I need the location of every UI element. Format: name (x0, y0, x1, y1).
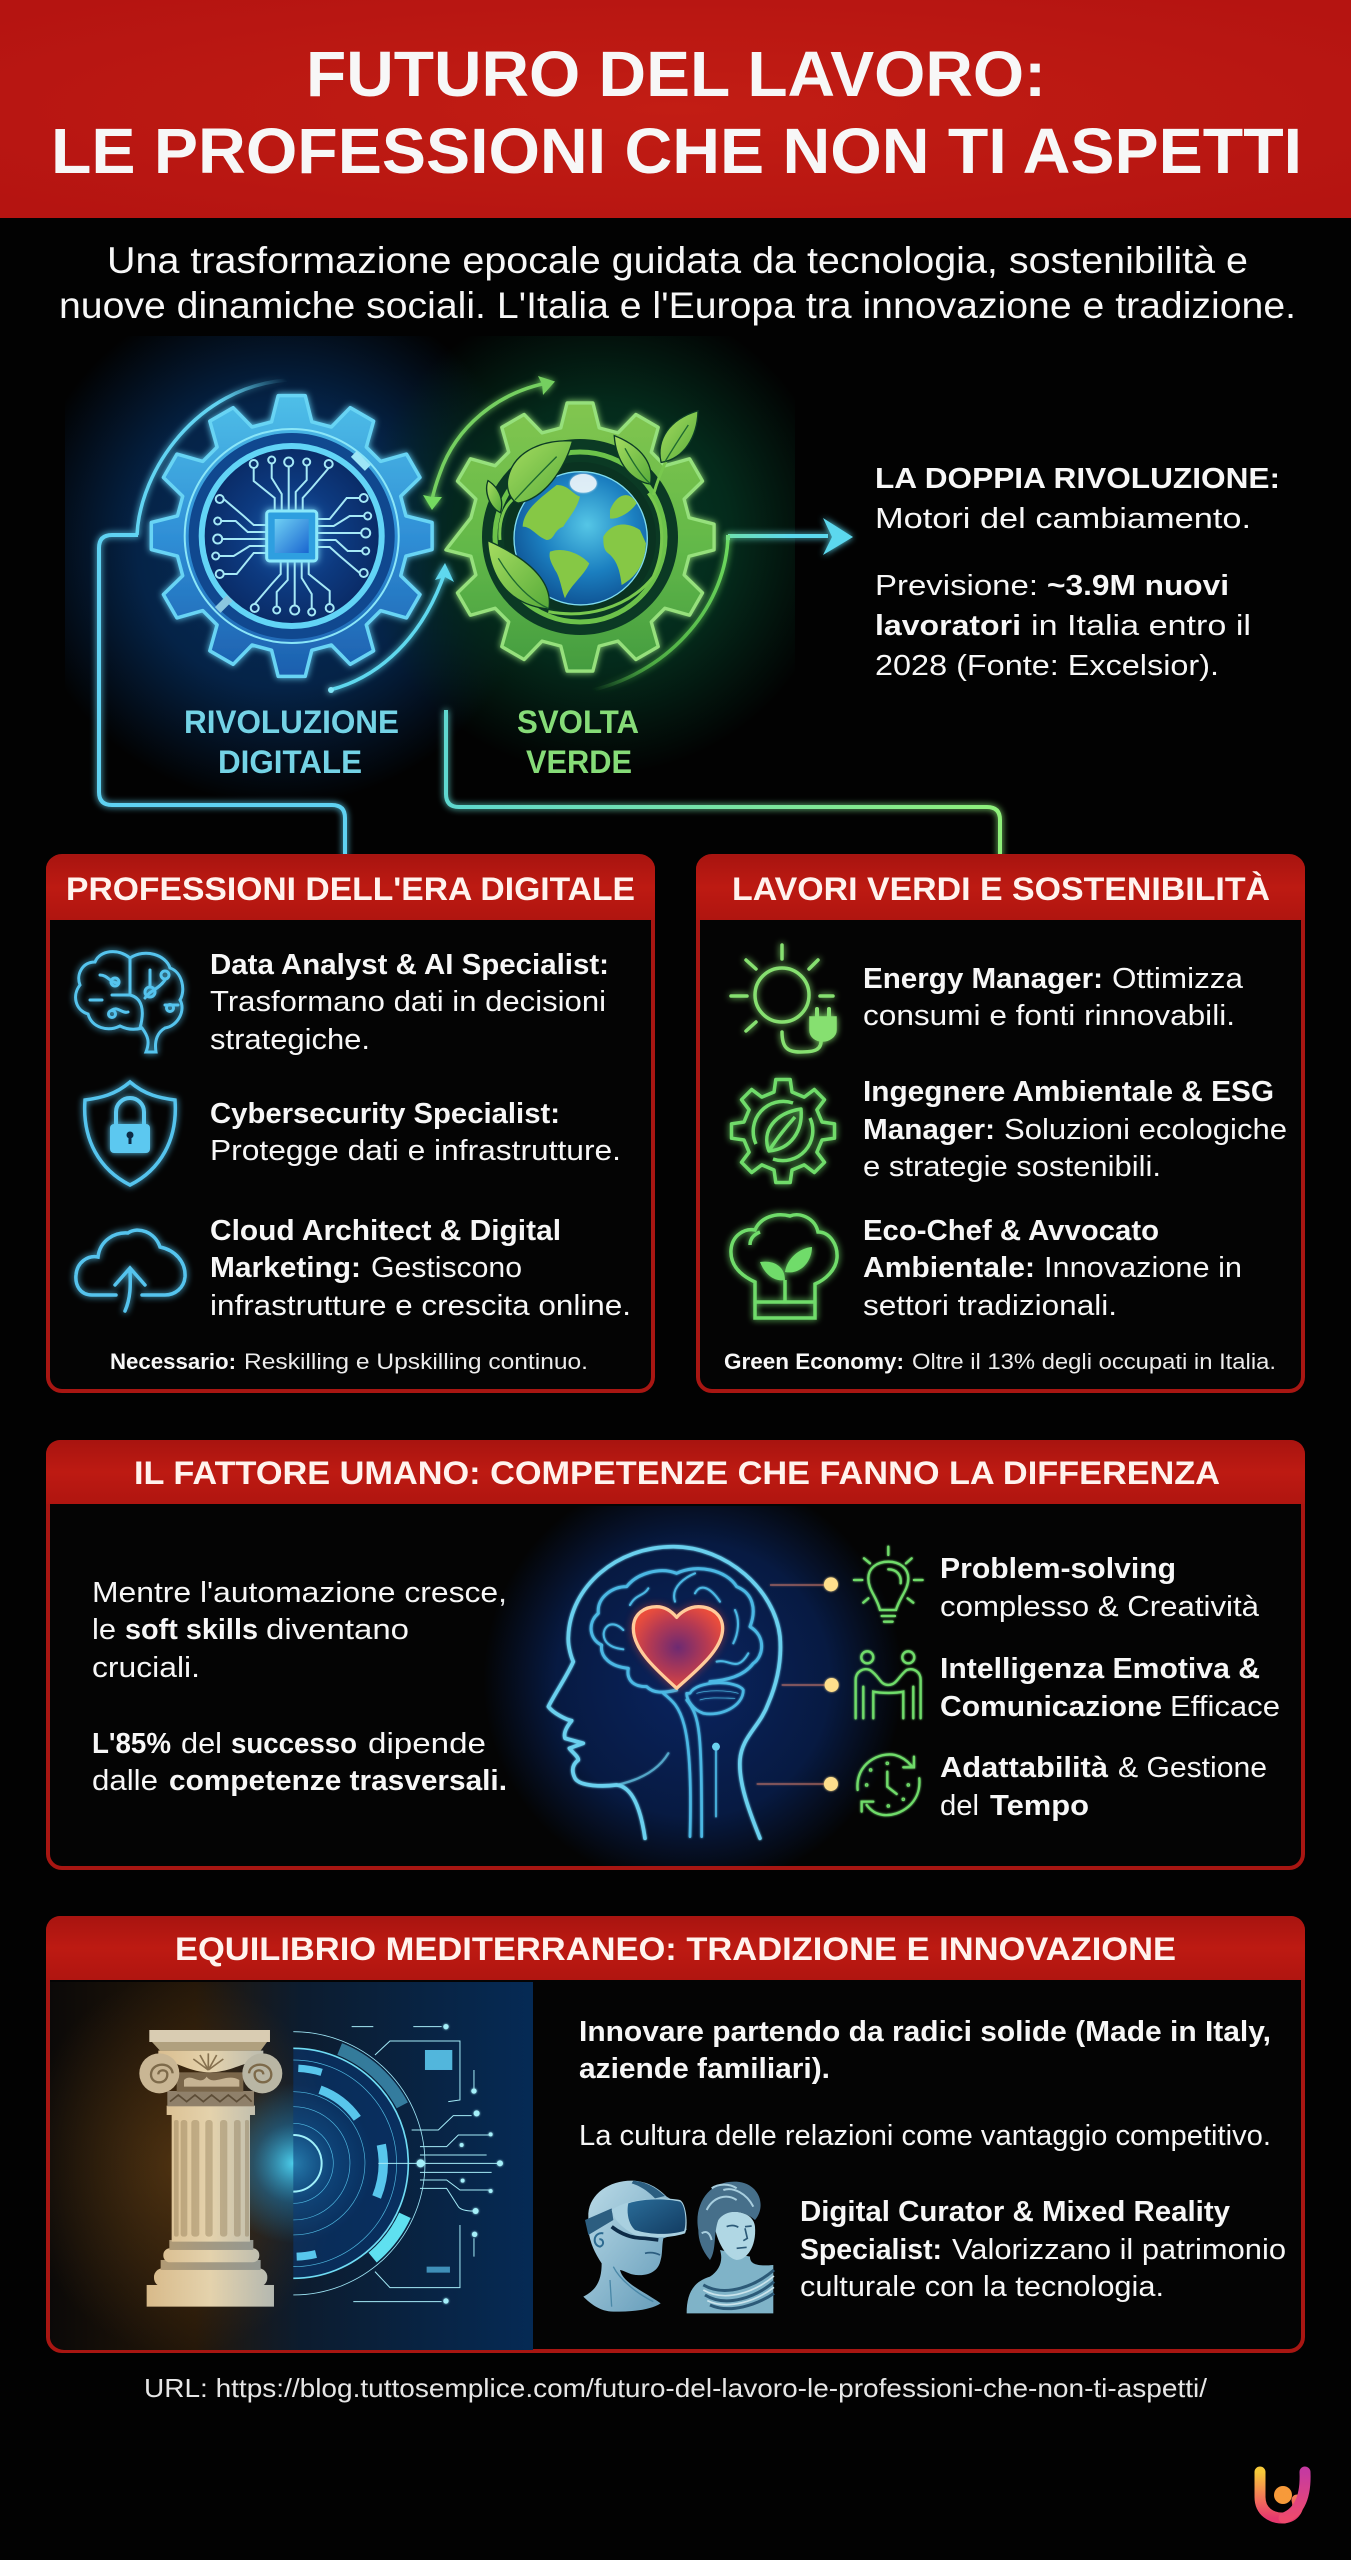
job text: data analyst: Trasformano dati in decisioni (210, 986, 606, 1018)
source url: URL: https://blog.tuttosemplice.com/futuro-del-lavoro-le-professioni-che-non-ti-aspetti/ (144, 2373, 1208, 2403)
label: svolta verde: VERDE (526, 744, 632, 780)
subtitle: nuove dinamiche sociali. L'Italia e l'Europa tra innovazione e tradizione. (59, 285, 1296, 326)
illustration: head with brain and heart (478, 1506, 923, 1866)
arrow to right (728, 518, 853, 555)
text: soft skills: soft skills (125, 1614, 258, 1646)
text: soft skills: Mentre l'automazione cresce, (92, 1577, 507, 1609)
panel heading: PROFESSIONI DELL'ERA DIGITALE (66, 871, 635, 907)
text: innovare (579, 2016, 1271, 2085)
title line 2: LE PROFESSIONI CHE NON TI ASPETTI (51, 115, 1302, 187)
heart (633, 1607, 723, 1688)
icon: sun with plug (731, 945, 835, 1052)
label: rivoluzione digitale (184, 704, 399, 780)
text block: la doppia rivoluzione: ~3.9M nuovi (1047, 570, 1229, 602)
job text: digital curator (800, 2196, 1286, 2303)
label: rivoluzione digitale: RIVOLUZIONE (184, 704, 399, 740)
icon: handshake (856, 1651, 921, 1718)
icon: clock (857, 1754, 919, 1815)
job text: energy manager: consumi e fonti rinnovabili. (863, 1000, 1235, 1032)
brain (591, 1569, 762, 1837)
skill: adaptability: Adattabilità (940, 1752, 1109, 1784)
job text: eco-chef: Ambientale: (863, 1252, 1035, 1284)
connector dots (757, 1577, 839, 1791)
panel note: Oltre il 13% degli occupati in Italia. (912, 1349, 1276, 1374)
panel note: Green Economy: (724, 1349, 904, 1374)
chip (267, 511, 317, 561)
text: soft skills: del (181, 1728, 222, 1760)
text: soft skills: L'85% (92, 1728, 171, 1760)
panel heading: IL FATTORE UMANO: COMPETENZE CHE FANNO LA DIFFERENZA (134, 1455, 1220, 1491)
text block: la doppia rivoluzione: LA DOPPIA RIVOLUZIONE: (875, 463, 1280, 495)
skill: adaptability: Tempo (990, 1790, 1089, 1822)
job text: cybersecurity: Protegge dati e infrastrutture. (210, 1135, 621, 1167)
job text: ingegnere ambientale: Soluzioni ecologiche (1004, 1114, 1287, 1146)
panel: professioni dell'era digitale (46, 855, 655, 1391)
connector lines to panels (99, 535, 1000, 858)
illustration: VR head and classical bust (583, 2181, 774, 2313)
icon: brain (76, 952, 183, 1052)
subtitle (59, 240, 1296, 326)
job text: ingegnere ambientale (863, 1076, 1287, 1183)
label: svolta verde (517, 704, 639, 780)
panel: equilibrio mediterraneo (20, 1916, 1305, 2355)
label: rivoluzione digitale: DIGITALE (218, 744, 362, 780)
leaves (487, 412, 697, 614)
icon: chef hat with sprout (731, 1215, 837, 1318)
panel heading: LAVORI VERDI E SOSTENIBILITÀ (732, 871, 1270, 907)
job text: energy manager (863, 963, 1244, 1032)
text: soft skills: diventano (266, 1614, 409, 1646)
skill: emotional intelligence: Comunicazione (940, 1691, 1162, 1723)
text: soft skills: le (92, 1614, 116, 1646)
job text: cybersecurity: Cybersecurity Specialist: (210, 1098, 560, 1130)
icon: lightbulb (854, 1547, 923, 1622)
skill: emotional intelligence: Efficace (1170, 1691, 1280, 1723)
text block: la doppia rivoluzione: Previsione: (875, 570, 1038, 602)
job text: data analyst (210, 949, 609, 1056)
job text: data analyst: strategiche. (210, 1024, 370, 1056)
job text: cybersecurity (210, 1098, 621, 1167)
text block: la doppia rivoluzione: Motori del cambiamento. (875, 503, 1251, 535)
digital half circle (293, 2005, 503, 2325)
job text: cloud architect: Gestiscono (371, 1252, 522, 1284)
skill: adaptability: del (940, 1790, 979, 1822)
skill: adaptability (940, 1752, 1267, 1822)
text: soft skills: dalle (92, 1765, 158, 1797)
circuit traces (352, 2027, 500, 2302)
skill: problem solving (940, 1553, 1260, 1623)
text: soft skills (92, 1577, 507, 1797)
job text: digital curator: Digital Curator & Mixed Reality (800, 2196, 1230, 2228)
skill: adaptability: & Gestione (1118, 1752, 1267, 1784)
job text: eco-chef: Eco-Chef & Avvocato (863, 1215, 1159, 1247)
globe (514, 472, 647, 605)
icon: gear with leaf (732, 1080, 834, 1182)
job text: digital curator: culturale con la tecnologia. (800, 2271, 1164, 2303)
text: soft skills: successo (231, 1728, 357, 1760)
job text: eco-chef: Innovazione in (1044, 1252, 1242, 1284)
text block: la doppia rivoluzione: 2028 (Fonte: Excelsior). (875, 650, 1219, 682)
label: svolta verde: SVOLTA (517, 704, 639, 740)
header banner with title (0, 0, 1351, 218)
job text: data analyst: Data Analyst & AI Specialist: (210, 949, 609, 981)
job text: energy manager: Energy Manager: (863, 963, 1103, 995)
text: soft skills: cruciali. (92, 1652, 200, 1684)
job text: cloud architect: infrastrutture e crescita online. (210, 1290, 631, 1322)
panel note (724, 1349, 1276, 1374)
icon: green gear with globe (446, 403, 714, 671)
job text: ingegnere ambientale: Ingegnere Ambientale & ESG (863, 1076, 1274, 1108)
text: innovare: aziende familiari). (579, 2053, 830, 2085)
panel note: Reskilling e Upskilling continuo. (244, 1349, 588, 1374)
job text: cloud architect: Cloud Architect & Digital (210, 1215, 561, 1247)
job text: cloud architect: Marketing: (210, 1252, 361, 1284)
job text: ingegnere ambientale: Manager: (863, 1114, 995, 1146)
job text: eco-chef (863, 1215, 1242, 1322)
circular arrows (137, 376, 728, 693)
title line 1: FUTURO DEL LAVORO: (306, 38, 1046, 110)
logo (1260, 2472, 1305, 2518)
job text: energy manager: Ottimizza (1112, 963, 1244, 995)
job text: ingegnere ambientale: e strategie sostenibili. (863, 1151, 1161, 1183)
panel note: Necessario: (110, 1349, 236, 1374)
chip traces (212, 456, 371, 616)
classical column (139, 2030, 282, 2307)
head outline (548, 1547, 780, 1838)
skill: problem solving: complesso & Creatività (940, 1591, 1260, 1623)
panel heading: EQUILIBRIO MEDITERRANEO: TRADIZIONE E INNOVAZIONE (175, 1931, 1176, 1967)
job text: digital curator: Specialist: (800, 2234, 942, 2266)
text block: la doppia rivoluzione (875, 463, 1280, 682)
skill: problem solving: Problem-solving (940, 1553, 1176, 1585)
text block: la doppia rivoluzione: lavoratori (875, 610, 1021, 642)
icon: shield with lock (85, 1082, 175, 1185)
icon: blue digital gear (151, 396, 432, 676)
text: soft skills: dipende (368, 1728, 486, 1760)
panel note (110, 1349, 588, 1374)
skill: emotional intelligence: Intelligenza Emotiva & (940, 1653, 1260, 1685)
text: soft skills: competenze trasversali. (169, 1765, 507, 1797)
skill: emotional intelligence (940, 1653, 1280, 1723)
job text: eco-chef: settori tradizionali. (863, 1290, 1117, 1322)
subtitle: Una trasformazione epocale guidata da tecnologia, sostenibilità e (107, 240, 1248, 281)
text: innovare: Innovare partendo da radici solide (Made in Italy, (579, 2016, 1271, 2048)
job text: cloud architect (210, 1215, 631, 1322)
illustration: column and digital circuit (20, 1975, 533, 2355)
job text: digital curator: Valorizzano il patrimonio (952, 2234, 1286, 2266)
text block: la doppia rivoluzione: in Italia entro il (1031, 610, 1251, 642)
icon: cloud upload (76, 1230, 185, 1311)
panel: lavori verdi e sostenibilità (696, 855, 1305, 1391)
illustration: double revolution gears (65, 336, 1000, 858)
text: cultura: La cultura delle relazioni come vantaggio competitivo. (579, 2120, 1271, 2152)
panel: il fattore umano (46, 1440, 1305, 1868)
